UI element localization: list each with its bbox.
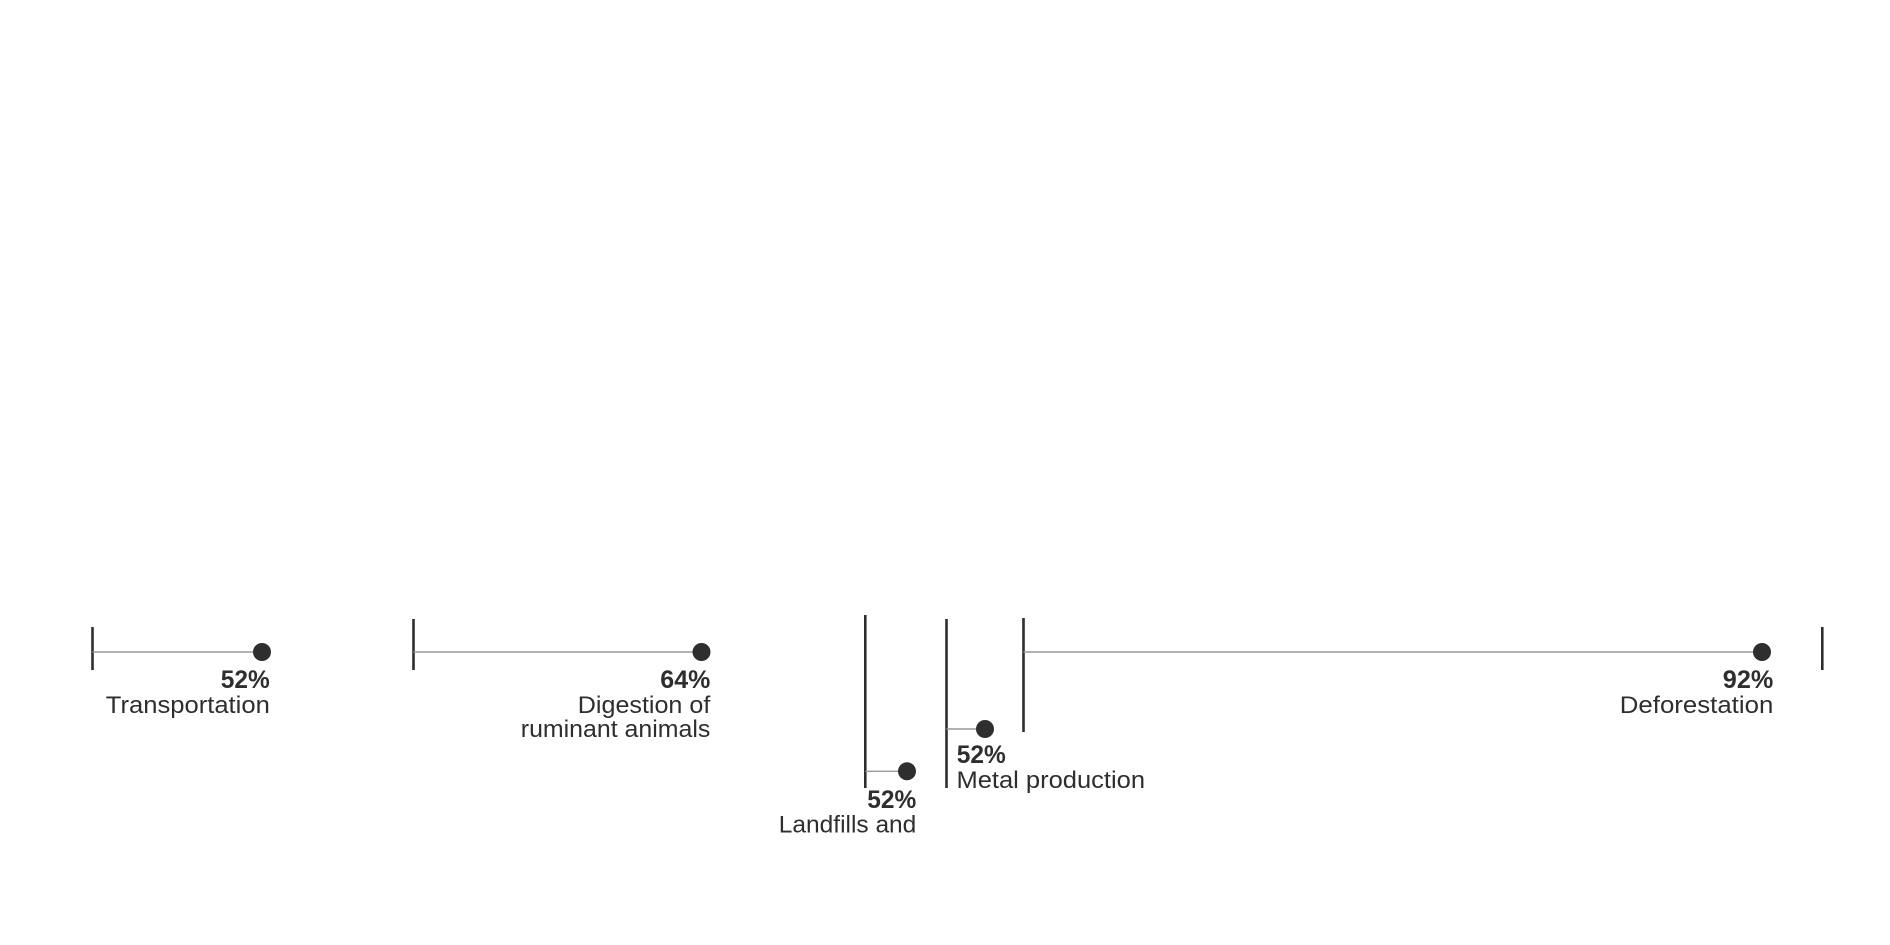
item: Transportation: Transportation (106, 692, 270, 719)
item: Metal production (946, 619, 1145, 794)
item: Digestion of ruminant animals: ruminant animals (521, 716, 710, 743)
item: Digestion of ruminant animals: 64% (660, 666, 710, 694)
item: Transportation: 52% (221, 666, 270, 694)
item: Landfills and: 52% (867, 786, 916, 814)
item: Metal production: 52% (957, 741, 1006, 769)
item: Metal production: Metal production (956, 767, 1145, 794)
item: Deforestation: 92% (1723, 666, 1773, 694)
item: Digestion of ruminant animals: Digestion of (578, 692, 711, 719)
item: Digestion of ruminant animals (414, 619, 711, 743)
item: Deforestation (1024, 618, 1773, 732)
item: Transportation (92, 627, 271, 719)
end tick (1821, 627, 1824, 670)
item: Landfills and: Landfills and (779, 811, 916, 838)
item: Deforestation: Deforestation (1620, 692, 1773, 719)
item: Landfills and (779, 615, 916, 838)
